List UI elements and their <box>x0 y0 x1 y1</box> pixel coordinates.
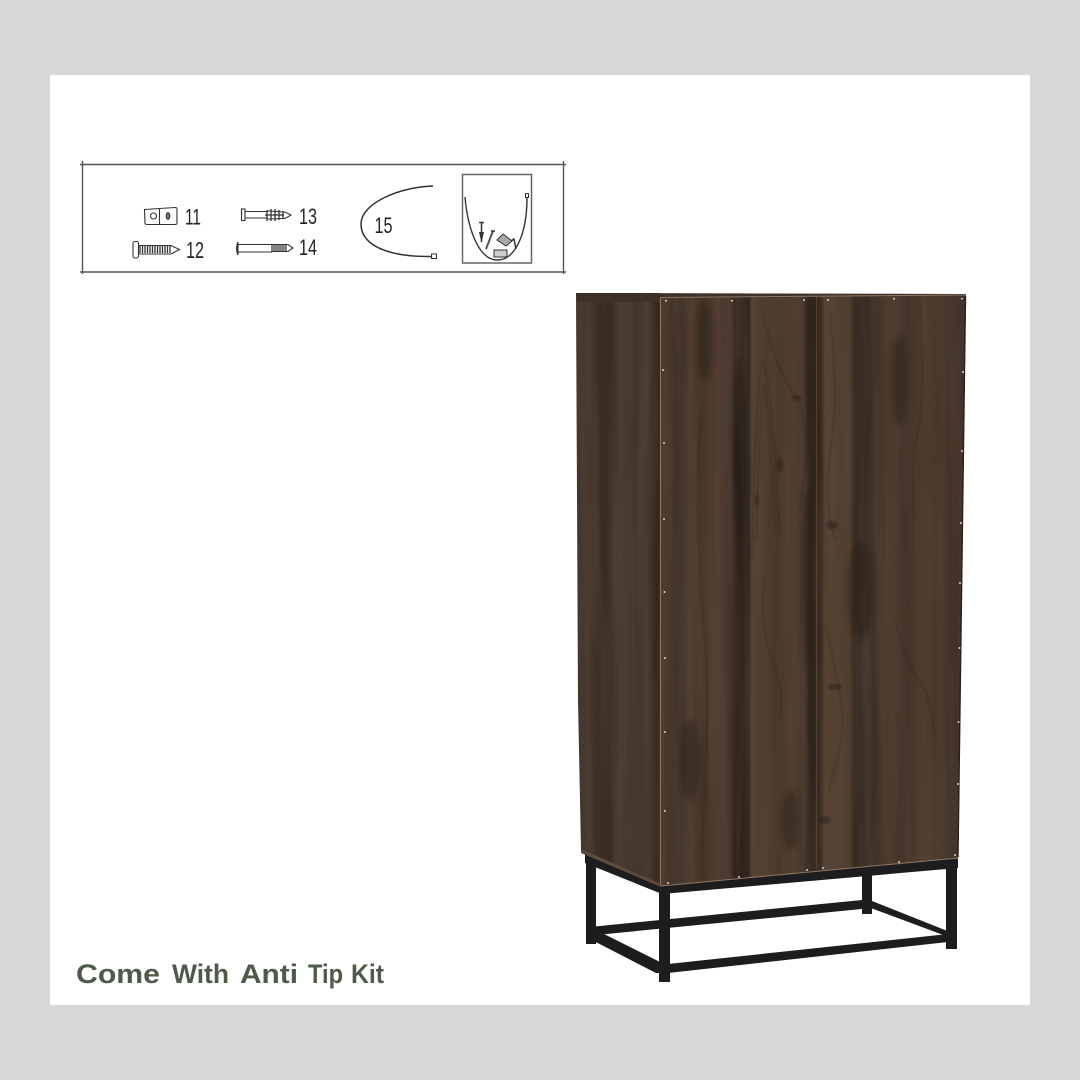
part 15: cable <box>361 186 436 258</box>
panel seams <box>660 295 966 886</box>
part 13: wall anchor <box>242 204 317 229</box>
rear-centre leg <box>862 868 872 914</box>
right leg <box>946 855 957 949</box>
side panel wood <box>576 293 661 886</box>
part 11: bracket: 11 <box>185 204 201 230</box>
metal base <box>585 850 958 982</box>
caption: Tip <box>308 959 343 989</box>
part 12: screw <box>133 237 204 263</box>
part 13: wall anchor: 13 <box>299 204 317 229</box>
front lower rail <box>668 934 948 973</box>
wood grain texture <box>594 293 942 884</box>
part 11: bracket <box>144 204 201 230</box>
caption: Anti <box>240 959 298 989</box>
diagram frame <box>80 161 566 274</box>
left lower rail <box>588 930 662 973</box>
back panel wood <box>660 294 966 886</box>
front leg <box>659 884 670 982</box>
fasteners <box>662 298 964 884</box>
rear lower rail <box>590 900 872 936</box>
part 12: screw: 12 <box>186 237 204 263</box>
caption <box>76 959 384 989</box>
top frame <box>585 850 958 894</box>
right lower rail <box>868 901 950 936</box>
wood cathedral figure <box>680 302 909 849</box>
caption: Come <box>76 959 160 989</box>
part 14: long screw <box>236 235 317 260</box>
part 15: cable: 15 <box>374 213 392 238</box>
top edge <box>576 293 966 302</box>
white panel <box>50 75 1030 1005</box>
caption: With <box>172 959 229 989</box>
part 14: long screw: 14 <box>299 235 317 260</box>
side edge band <box>581 849 661 887</box>
panel: anti tip kit parts diagram <box>80 161 566 274</box>
product: cabinet rear view with metal base <box>576 293 966 982</box>
kit pouch <box>462 174 532 263</box>
caption: Kit <box>351 959 384 989</box>
rear-left leg <box>586 850 596 944</box>
